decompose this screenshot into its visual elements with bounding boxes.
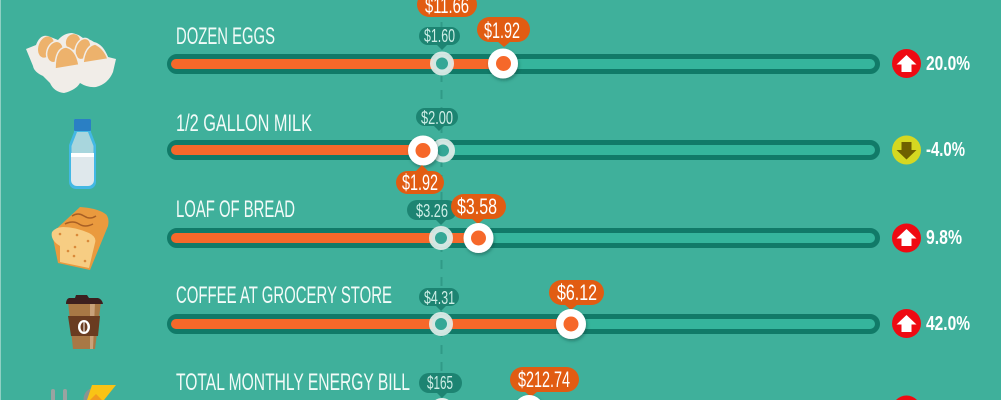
row: dozen eggs xyxy=(26,0,970,93)
row: bread xyxy=(52,194,962,270)
marker: 1.92 current xyxy=(477,17,530,78)
icon: energy bolt and plug xyxy=(53,385,116,400)
marker: 3.26 baseline: $3.26 xyxy=(416,201,448,221)
slider track: eggs xyxy=(170,56,878,72)
marker: 212.74 current xyxy=(510,367,579,400)
icon: egg carton xyxy=(26,32,116,93)
change: -4.0% xyxy=(892,136,965,164)
marker: 3.26 baseline xyxy=(407,200,457,247)
label: milk: 1/2 GALLON MILK xyxy=(176,110,312,137)
label: coffee: COFFEE AT GROCERY STORE xyxy=(176,282,392,309)
change icon: energy xyxy=(892,396,921,400)
slider track: bread xyxy=(170,230,878,246)
marker: 2.00 baseline xyxy=(416,108,458,160)
row: coffee xyxy=(66,280,970,349)
marker: 4.31 baseline xyxy=(419,288,459,333)
label: dozen eggs: DOZEN EGGS xyxy=(176,23,275,50)
label: bread: LOAF OF BREAD xyxy=(176,196,295,223)
change: 9.8% xyxy=(892,224,962,252)
change: 42.0%: 42.0% xyxy=(926,313,970,335)
marker: 1.60 baseline: $1.60 xyxy=(424,26,455,46)
marker: 6.12 current xyxy=(549,280,604,339)
marker: 3.58 current: $3.58 xyxy=(457,194,497,219)
marker: 2.00 baseline: $2.00 xyxy=(421,108,453,128)
marker: 212.74 current: $212.74 xyxy=(518,367,570,392)
marker: 1.92 current xyxy=(396,136,444,195)
slider track: milk xyxy=(170,142,878,158)
slider track: coffee xyxy=(170,316,878,332)
icon: loaf of bread xyxy=(52,207,108,270)
marker: 165 baseline xyxy=(419,373,462,400)
marker: 6.12 current: $6.12 xyxy=(557,280,597,305)
change: 42.0% xyxy=(892,309,970,338)
marker: 165 baseline: $165 xyxy=(427,373,453,393)
marker: 1.92 current: $1.92 xyxy=(484,18,520,43)
change: 20.0%: 20.0% xyxy=(926,53,970,75)
change: 9.8%: 9.8% xyxy=(926,227,962,249)
marker: 1.92 current: $1.92 xyxy=(402,170,438,195)
marker: 4.31 baseline: $4.31 xyxy=(424,288,455,308)
marker: 3.58 current xyxy=(451,194,506,253)
change: -4.0%: -4.0% xyxy=(926,139,965,161)
row: energy xyxy=(53,367,921,400)
marker: 1.60 baseline xyxy=(419,26,460,72)
label: energy: TOTAL MONTHLY ENERGY BILL xyxy=(176,369,410,396)
icon: coffee cup xyxy=(66,295,103,349)
change: 20.0% xyxy=(892,49,970,78)
icon: milk bottle xyxy=(69,119,96,189)
row: milk xyxy=(69,108,965,195)
